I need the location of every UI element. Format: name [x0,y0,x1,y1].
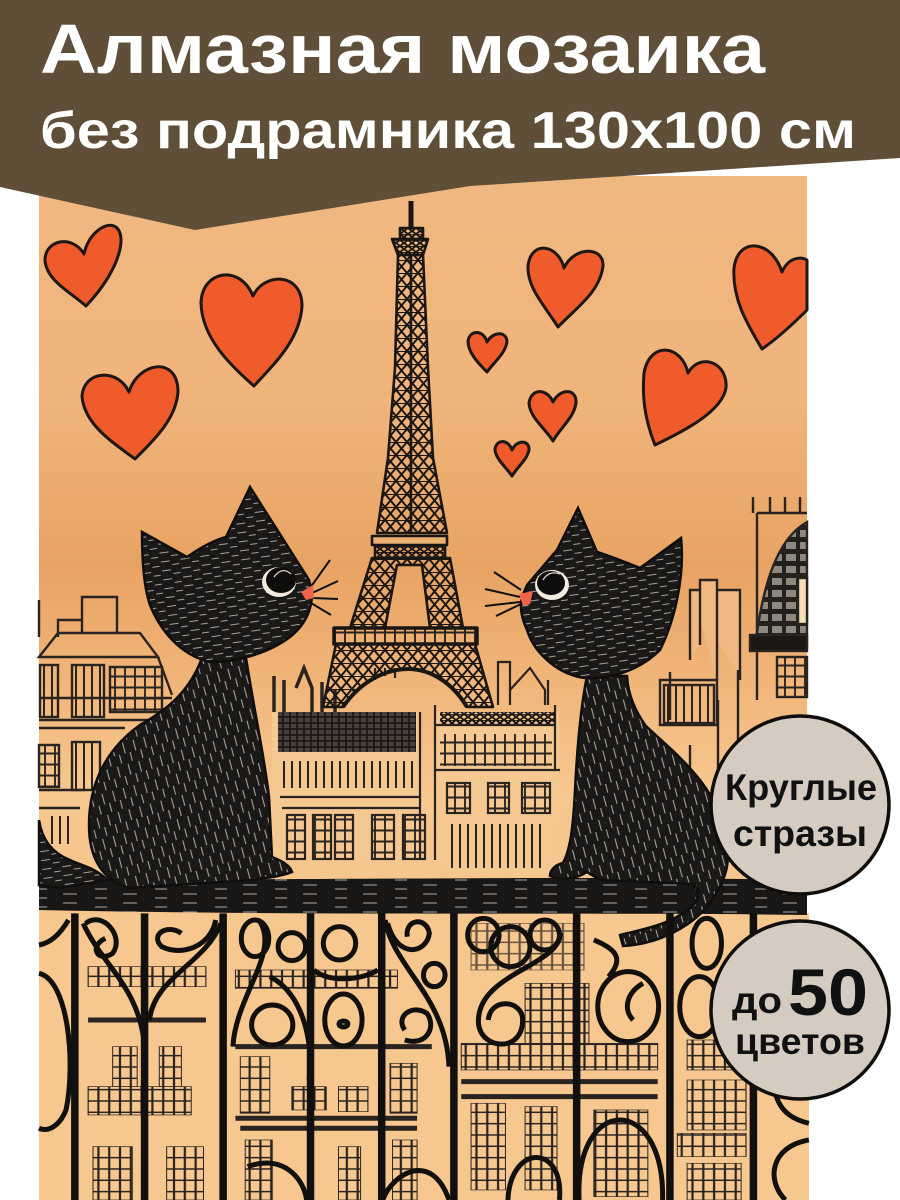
badge: up to 50 colours: цветов [735,1021,865,1062]
center buildings [272,662,560,870]
Eiffel tower [323,201,493,707]
badge: up to 50 colours: 50 [788,955,868,1029]
whiskers [310,560,338,615]
lower buildings [39,913,809,1200]
eye [262,567,296,597]
subtitle: без подрамника 130х100 см [40,102,856,160]
nose [301,585,314,600]
scrollwork [39,918,809,1200]
artwork: painting [39,176,809,1200]
nose [519,591,533,606]
badge: round rhinestones: стразы [733,813,867,854]
head [521,508,682,678]
badge: round rhinestones: Круглые [725,767,877,808]
header banner [0,0,900,230]
right cat [485,508,728,946]
head [142,487,312,662]
body [89,658,292,888]
badge: up to 50 colours [711,921,889,1099]
right buildings [660,497,807,790]
left buildings [39,597,172,844]
ledge [39,876,807,915]
sky background [39,176,807,1200]
posts [75,913,753,1200]
body with tail [550,676,728,946]
title: Алмазная мозаика [40,10,766,88]
whiskers [485,572,521,616]
iron railing [39,913,809,1200]
badge: up to 50 colours: до [732,980,782,1021]
left cat [39,487,338,888]
tail [39,820,108,888]
badge: round rhinestones [711,716,889,894]
hearts [45,225,807,476]
eye [535,570,569,600]
